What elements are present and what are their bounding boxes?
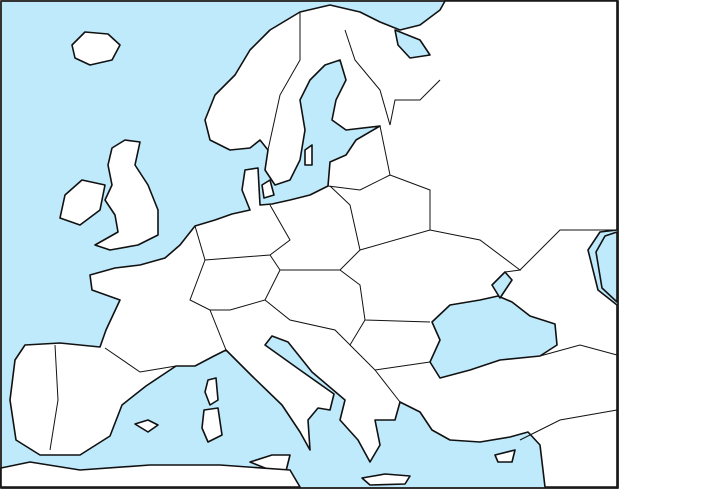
sea: Black Sea xyxy=(430,296,557,378)
island: Zealand xyxy=(262,180,274,198)
land: North Africa xyxy=(1,462,300,487)
island: Great Britain xyxy=(95,140,158,250)
sea: White Sea xyxy=(395,30,430,58)
borders xyxy=(50,12,617,450)
island: Iceland xyxy=(72,32,120,65)
island: Ireland xyxy=(60,180,105,225)
island: Crete xyxy=(362,474,410,485)
island: Sicily xyxy=(250,455,290,475)
sea: Caspian xyxy=(596,232,617,302)
island: Corsica xyxy=(205,378,218,405)
island: Cyprus xyxy=(495,450,515,462)
island: Balearics xyxy=(135,420,158,432)
sea: Sea of Azov xyxy=(492,272,512,298)
island: Sardinia xyxy=(202,408,222,442)
island: Gotland xyxy=(305,145,312,165)
